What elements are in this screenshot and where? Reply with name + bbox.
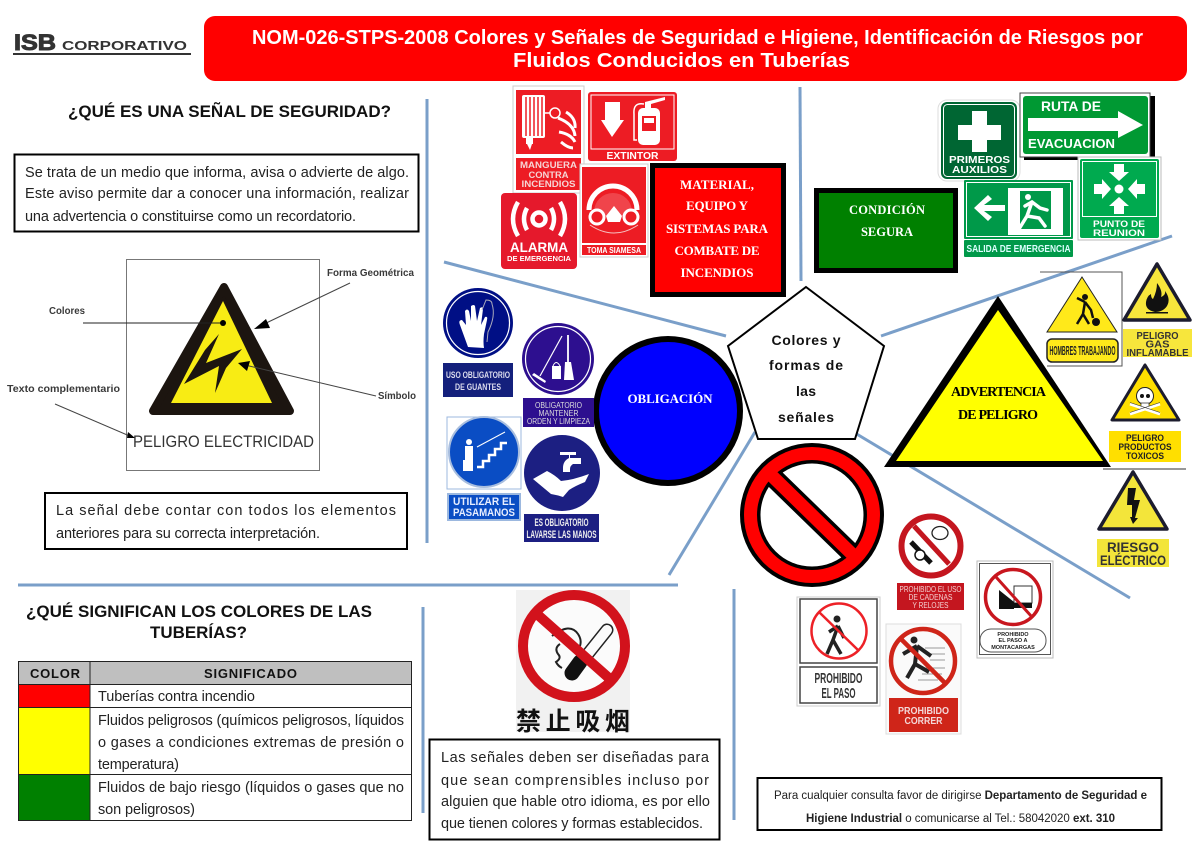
sign: obligatorio lavarse las manos: ES OBLIGATORIO: [534, 517, 589, 529]
callout: colores: [49, 306, 226, 326]
category box: condición segura: SEGURA: [861, 225, 913, 239]
category: prohibition symbol: [740, 443, 884, 587]
text box: universal design note: [430, 740, 720, 840]
sign: primeros auxilios: PRIMEROS: [949, 154, 1010, 166]
sign: uso obligatorio de guantes: DE GUANTES: [455, 382, 501, 392]
sign: utilizar el pasamanos: PASAMANOS: [453, 507, 515, 519]
category: obligación blue circle: OBLIGACIÓN: [628, 391, 713, 406]
sign: obligatorio lavarse las manos: LAVARSE LAS MANOS: [526, 529, 596, 541]
text box: universal design note: alguien que hable otro idioma, es por ello: [441, 794, 710, 810]
sign: punto de reunión: REUNION: [1093, 228, 1145, 239]
sign: punto de reunión: PUNTO DE: [1093, 219, 1145, 230]
table: pipe colours: Fluidos peligrosos (químicos peligrosos, líquidos: [98, 713, 404, 729]
logo: ISB Corporativo: [13, 30, 191, 55]
sign: prohibido paso a montacargas: [977, 561, 1053, 658]
text box: universal design note: Las señales deben ser diseñadas para: [441, 750, 710, 766]
sign: ruta de evacuación: RUTA DE: [1041, 99, 1101, 114]
sign: alarma de emergencia: ALARMA: [510, 240, 568, 255]
icon: electrical warning triangle: [153, 287, 290, 411]
sign: manguera contra incendios: [513, 86, 584, 193]
sign: utilizar el pasamanos: UTILIZAR EL: [453, 496, 515, 508]
text box: interpretation note: anteriores para su correcta interpretación.: [56, 526, 320, 542]
table: pipe colours: temperatura): [98, 757, 179, 773]
diagram: anatomy of a safety sign: [7, 260, 416, 470]
sign: hombres trabajando: [1040, 272, 1122, 366]
sign: prohibido paso a montacargas: MONTACARGAS: [991, 645, 1035, 651]
sign: extintor: EXTINTOR: [606, 151, 659, 162]
table: pipe colours: o gases a condiciones extremas de presión o: [98, 735, 404, 751]
text box: definition: una advertencia o constituirse como un recordatorio.: [25, 209, 356, 225]
contact box: [758, 778, 1162, 830]
sign: riesgo eléctrico: [1097, 472, 1169, 568]
sign: utilizar el pasamanos: [447, 417, 521, 521]
table: pipe colours: COLOR: [30, 666, 81, 681]
sign: prohibido el paso: PROHIBIDO: [814, 670, 863, 687]
sign: manguera contra incendios: INCENDIOS: [522, 179, 576, 190]
sign: manguera contra incendios: CONTRA: [528, 170, 569, 181]
category box: material, equipo y sistemas: INCENDIOS: [680, 265, 754, 280]
text box: universal design note: que tienen colores y formas establecidos.: [441, 816, 703, 832]
sign: prohibido cadenas y relojes: PROHIBIDO EL USO: [900, 585, 962, 594]
category box: condición segura: [816, 190, 956, 270]
text box: definition: Este aviso permite dar a conocer una información, realizar: [25, 186, 409, 202]
callout: símbolo: [238, 361, 416, 402]
sign: uso obligatorio de guantes: [443, 288, 513, 397]
category box: material, equipo y sistemas: COMBATE DE: [674, 243, 760, 258]
callout: forma geométrica: [254, 268, 414, 329]
category: advertencia de peligro triangle: ADVERTENCIA: [951, 385, 1047, 400]
heading: qué es una señal: ¿QUÉ ES UNA SEÑAL DE SEGURIDAD?: [68, 101, 391, 121]
sign: peligro productos tóxicos: PELIGRO: [1126, 433, 1164, 444]
central pentagon: colores y formas: las: [796, 383, 816, 399]
sign: prohibido cadenas y relojes: [897, 516, 964, 610]
icon: no smoking sign: [516, 590, 630, 736]
logo: ISB Corporativo: ISB: [14, 30, 56, 55]
table: pipe colours: SIGNIFICADO: [204, 666, 297, 681]
sign: manguera contra incendios: MANGUERA: [520, 160, 577, 171]
central pentagon: colores y formas: señales: [778, 409, 834, 425]
sign: prohibido el paso: [797, 597, 880, 706]
sign: mantener orden y limpieza: ORDEN Y LIMPIEZA: [527, 417, 591, 426]
sign: peligro productos tóxicos: TOXICOS: [1126, 451, 1164, 462]
category: advertencia de peligro triangle: [884, 296, 1111, 467]
icon: no smoking sign: 禁止吸烟: [516, 708, 630, 736]
sign: prohibido correr: CORRER: [904, 716, 943, 727]
sign: peligro gas inflamable: PELIGRO: [1136, 331, 1179, 342]
sign: mantener orden y limpieza: MANTENER: [538, 409, 579, 418]
group: prohibition signs: [740, 443, 1053, 734]
text box: definition: Se trata de un medio que informa, avisa o advierte de algo.: [25, 165, 409, 181]
sign: extintor: [588, 92, 677, 162]
category box: material, equipo y sistemas: EQUIPO Y: [686, 198, 749, 213]
text box: interpretation note: La señal debe contar con todos los elementos: [56, 503, 396, 519]
sign: ruta de evacuación: [1020, 93, 1155, 160]
sign: peligro productos tóxicos: [1103, 365, 1186, 469]
sign: toma siamesa: TOMA SIAMESA: [587, 246, 641, 255]
sign: peligro gas inflamable: GAS: [1146, 340, 1170, 350]
contact box: Higiene Industrial o comunicarse al Tel.: 58042020 ext. 310: [806, 813, 1115, 825]
sign: primeros auxilios: AUXILIOS: [952, 164, 1007, 176]
sign: primeros auxilios: [938, 100, 1020, 181]
category box: material, equipo y sistemas: MATERIAL,: [680, 177, 754, 192]
sign: riesgo eléctrico: ELÉCTRICO: [1100, 553, 1166, 568]
callout: texto complementario: [7, 384, 135, 438]
sign: prohibido cadenas y relojes: DE CADENAS: [908, 593, 952, 602]
sign: prohibido cadenas y relojes: Y RELOJES: [912, 601, 948, 610]
group: warning signs: [884, 264, 1192, 568]
group: safe condition signs: [816, 93, 1161, 270]
sign: prohibido correr: PROHIBIDO: [898, 706, 949, 717]
callout: símbolo: Símbolo: [378, 391, 416, 402]
heading: significado de colores de tuberías: ¿QUÉ SIGNIFICAN LOS COLORES DE LAS: [26, 602, 372, 621]
contact box: Para cualquier consulta favor de dirigirse Departamento de Seguridad e: [774, 790, 1147, 802]
sign: riesgo eléctrico: RIESGO: [1107, 540, 1159, 555]
header: title banner: [204, 16, 1187, 81]
sign: peligro productos tóxicos: PRODUCTOS: [1118, 442, 1172, 453]
sign: alarma de emergencia: DE EMERGENCIA: [507, 256, 571, 263]
group: fire signs: [501, 86, 784, 294]
sign: alarma de emergencia: [501, 193, 577, 269]
sign: prohibido paso a montacargas: PROHIBIDO: [997, 632, 1029, 638]
header: title banner: NOM-026-STPS-2008 Colores y Señales de Seguridad e Higiene, Identificación de Riesgos por: [252, 27, 1143, 49]
sign: prohibido paso a montacargas: EL PASO A: [999, 638, 1027, 644]
callout: forma geométrica: Forma Geométrica: [327, 268, 414, 279]
central pentagon: colores y formas: formas de: [769, 357, 843, 373]
callout: texto complementario: Texto complementario: [7, 384, 120, 395]
sign: mantener orden y limpieza: OBLIGATORIO: [535, 401, 582, 410]
logo: ISB Corporativo: CORPORATIVO: [62, 38, 187, 53]
category box: material, equipo y sistemas: [652, 166, 784, 294]
category box: material, equipo y sistemas: SISTEMAS PARA: [666, 221, 769, 236]
sign: peligro gas inflamable: [1123, 264, 1192, 359]
label: peligro electricidad: PELIGRO ELECTRICIDAD: [133, 432, 314, 451]
sign: prohibido el paso: EL PASO: [822, 685, 856, 702]
category: advertencia de peligro triangle: DE PELIGRO: [958, 408, 1038, 423]
sign: peligro gas inflamable: INFLAMABLE: [1126, 348, 1189, 359]
text box: universal design note: que sean comprensibles incluso por: [441, 773, 709, 789]
callout: colores: Colores: [49, 306, 85, 317]
text box: interpretation note: [45, 493, 407, 549]
sign: prohibido correr: [886, 624, 961, 734]
category: obligación blue circle: [596, 339, 740, 483]
heading: significado de colores de tuberías: TUBERÍAS?: [150, 623, 247, 642]
text box: definition: [14, 154, 418, 232]
sign: salida de emergencia: [964, 180, 1073, 257]
sign: uso obligatorio de guantes: USO OBLIGATORIO: [446, 370, 510, 380]
sign: punto de reunión: [1078, 157, 1161, 240]
group: obligation signs: [443, 288, 740, 542]
table: pipe colours: Tuberías contra incendio: [98, 689, 255, 705]
sign: ruta de evacuación: EVACUACION: [1028, 136, 1115, 151]
sign: mantener orden y limpieza: [522, 323, 594, 427]
table: pipe colours: son peligrosos): [98, 802, 195, 818]
header: title banner: Fluidos Conducidos en Tuberías: [513, 50, 850, 72]
sign: toma siamesa: [580, 164, 648, 257]
table: pipe colours: Fluidos de bajo riesgo (líquidos o gases que no: [98, 780, 404, 796]
sign: obligatorio lavarse las manos: [524, 435, 600, 542]
heading: significado de colores de tuberías: [26, 602, 372, 642]
sign: salida de emergencia: SALIDA DE EMERGENCIA: [966, 244, 1070, 255]
central pentagon: colores y formas: Colores y: [772, 332, 841, 348]
category box: condición segura: CONDICIÓN: [849, 203, 925, 217]
central pentagon: colores y formas: [728, 287, 884, 439]
table: pipe colours: [18, 662, 412, 820]
